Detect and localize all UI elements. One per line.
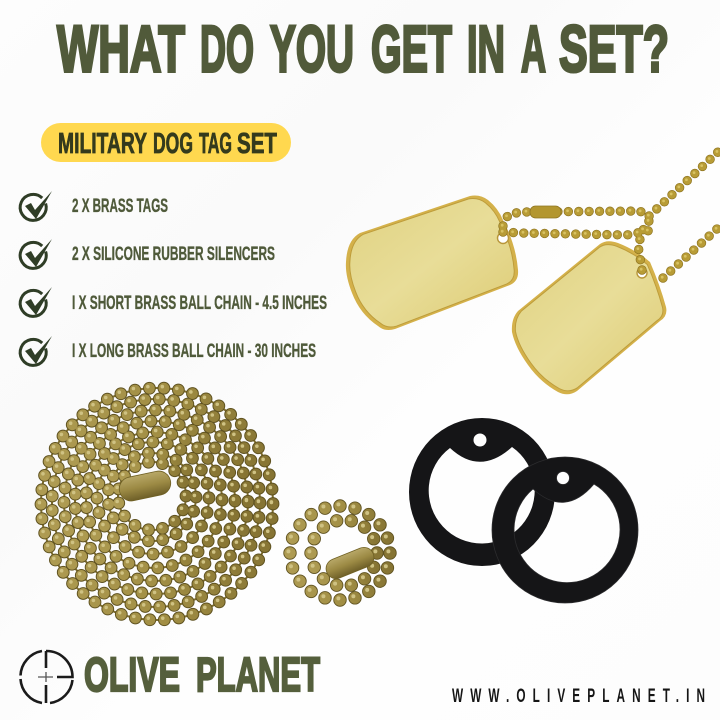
short chain connector [323, 544, 377, 582]
long chain connector [117, 469, 173, 503]
heading badge: military dog tag set: TAG [199, 128, 232, 160]
list item: brass tags [20, 191, 168, 220]
list item: silicone silencers: 2 X SILICONE RUBBER SILENCERS [72, 244, 275, 265]
brass dog tags photo [346, 151, 718, 394]
list item: short chain: I X SHORT BRASS BALL CHAIN - 4.5 INCHES [72, 293, 327, 314]
website url: WWW.OLIVEPLANET.IN [452, 686, 705, 707]
title: GET [371, 12, 452, 86]
wordmark: OLIVE [84, 648, 180, 702]
logo: olive planet [20, 648, 320, 703]
list item: silicone silencers [20, 239, 275, 268]
wordmark [84, 648, 320, 702]
heading badge: military dog tag set: DOG [153, 128, 193, 160]
heading badge: military dog tag set: SET [237, 128, 277, 160]
title: DO [200, 12, 254, 86]
heading badge: military dog tag set [41, 123, 291, 162]
title: YOU [270, 12, 354, 86]
silencer ring back [409, 418, 555, 566]
long brass ball chain photo [39, 386, 273, 620]
list item: long chain: I X LONG BRASS BALL CHAIN - 30 INCHES [72, 341, 316, 362]
icon: crosshair [20, 651, 72, 703]
title: IN [467, 12, 505, 86]
short brass ball chain photo [288, 504, 390, 600]
checklist of set contents [20, 191, 327, 365]
heading badge: military dog tag set: MILITARY [58, 128, 147, 160]
list item: short chain [20, 287, 327, 316]
black silicone silencers photo [409, 418, 638, 603]
title: WHAT [57, 12, 185, 86]
title [57, 12, 669, 86]
brass tag left [346, 196, 518, 330]
silencer ring front [492, 457, 638, 603]
list item: long chain [20, 336, 316, 365]
title: A [521, 12, 546, 86]
wordmark: PLANET [196, 648, 320, 702]
brass tag right [512, 241, 666, 394]
tag ball chains [502, 151, 718, 278]
list item: brass tags: 2 X BRASS TAGS [72, 196, 168, 217]
